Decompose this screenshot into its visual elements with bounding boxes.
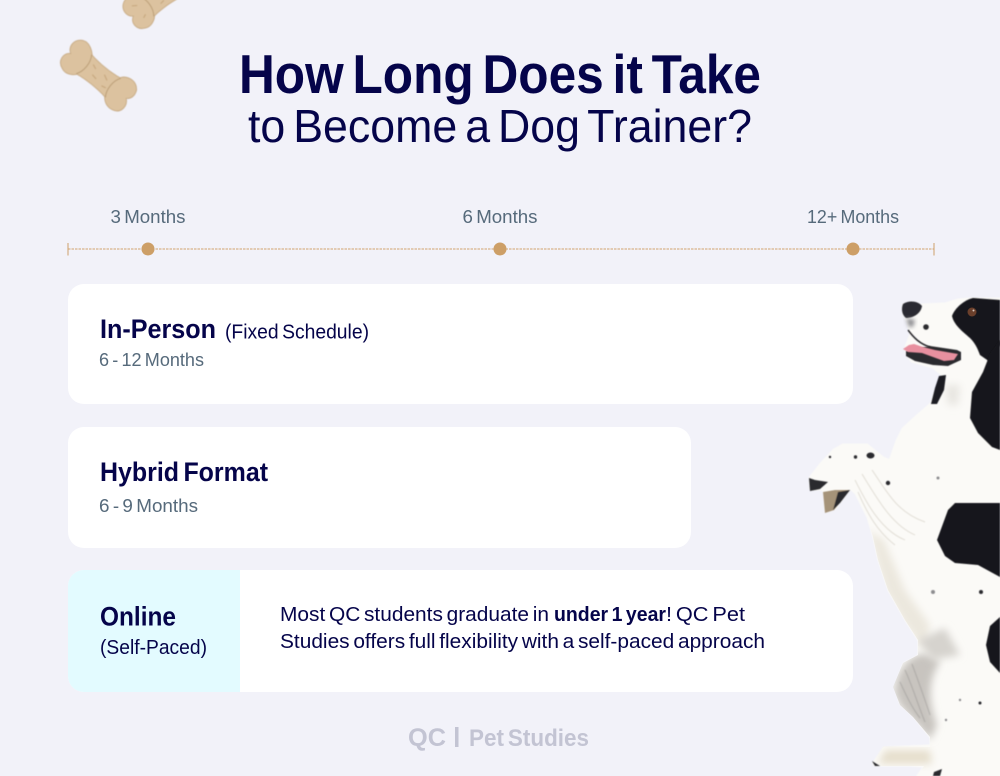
tongue <box>903 344 958 361</box>
online description: ! QC Pet <box>666 604 745 626</box>
panel: in-person: (Fixed Schedule) <box>225 322 369 344</box>
fur shading <box>855 385 960 764</box>
online label block: Online <box>100 602 176 632</box>
timeline <box>68 206 934 256</box>
icon: dog biscuit left <box>56 36 141 115</box>
icon: dog biscuit top <box>119 0 204 33</box>
title: to Become a Dog Trainer? <box>248 100 752 152</box>
title: How Long Does it Take <box>239 43 761 105</box>
online description <box>280 604 765 653</box>
logo: Pet Studies <box>469 725 589 752</box>
title <box>239 43 761 152</box>
panel: online <box>68 570 853 692</box>
upper lip line <box>908 330 930 347</box>
panel: in-person: 6 - 12 Months <box>99 349 204 370</box>
ear <box>970 340 1000 450</box>
logo: QC <box>408 724 446 752</box>
online description: Studies offers full flexibility with a self-paced approach <box>280 631 765 653</box>
dog body <box>810 299 1000 776</box>
body patch <box>937 503 1000 577</box>
panel: hybrid format: 6 - 9 Months <box>99 495 198 516</box>
timeline marker: 6 months: 6 Months <box>462 206 538 227</box>
mouth <box>906 346 961 366</box>
online label block: (Self-Paced) <box>100 637 207 659</box>
online label block <box>68 570 240 692</box>
timeline marker: 3 months <box>110 206 186 256</box>
panel: in-person: In-Person <box>100 314 216 344</box>
snout shading <box>906 318 915 327</box>
nose <box>902 302 922 318</box>
online description: under 1 year <box>554 604 666 626</box>
eye <box>968 308 976 316</box>
timeline marker: 12+ months <box>807 206 899 256</box>
neck shadow <box>931 375 946 404</box>
online description: Most QC students graduate in <box>280 604 549 626</box>
timeline marker: 3 months: 3 Months <box>110 206 186 227</box>
logo <box>408 724 589 752</box>
lower patch <box>986 617 1000 673</box>
panel: hybrid format: Hybrid Format <box>100 457 268 487</box>
timeline marker: 12+ months: 12+ Months <box>807 206 899 227</box>
head patch <box>952 298 1000 362</box>
spots and paw markings <box>809 324 983 776</box>
panel: in-person <box>68 284 853 404</box>
timeline marker: 6 months <box>462 206 538 256</box>
illustration: dog <box>809 298 1000 776</box>
panel: hybrid format <box>68 427 691 548</box>
